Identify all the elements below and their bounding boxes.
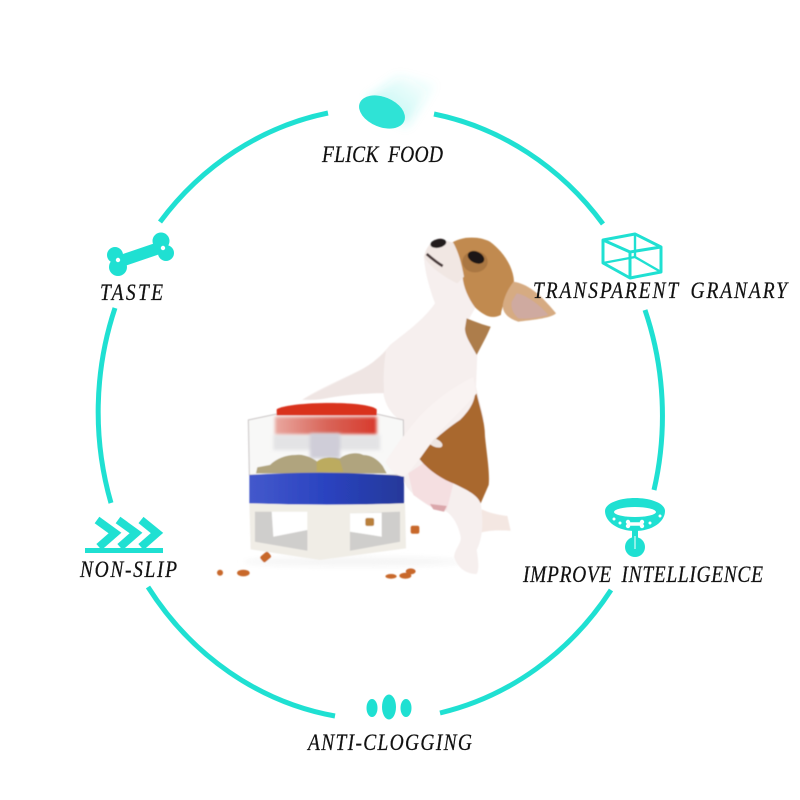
icon: bone — [107, 232, 174, 276]
circular ring of arcs — [98, 113, 662, 716]
kibbles — [217, 518, 419, 579]
feeder red lid — [277, 403, 377, 415]
label: flick food: FLICK FOOD — [321, 141, 443, 167]
eye patch — [462, 251, 488, 272]
shaded arm — [303, 351, 386, 400]
feeder white base — [249, 503, 406, 560]
pink belly — [408, 463, 453, 510]
feeder opening right — [350, 512, 400, 551]
kibble pile — [256, 453, 387, 473]
dog tail and back leg — [480, 509, 511, 533]
eye — [466, 249, 486, 266]
feeder lid inner blur — [275, 417, 377, 435]
label: taste: TASTE — [100, 279, 163, 305]
icon: transparent cube — [603, 234, 661, 278]
label: anti-clogging: ANTI-CLOGGING — [306, 729, 472, 755]
floor shadow — [243, 556, 463, 567]
tan chest — [465, 318, 491, 355]
icon: collar — [605, 498, 665, 557]
label: transparent granary: TRANSPARENT GRANARY — [533, 277, 789, 303]
feeder transparent container — [248, 414, 404, 475]
icon: non-slip chevrons — [85, 520, 163, 550]
feeder blue band — [249, 473, 404, 505]
front leg and paw — [386, 377, 477, 477]
nose — [430, 237, 447, 249]
icon: flick food — [354, 76, 436, 135]
ear — [503, 282, 556, 322]
muzzle — [424, 239, 464, 283]
dog body — [302, 239, 489, 574]
head — [450, 237, 514, 317]
label: improve intelligence: IMPROVE INTELLIGENCE — [522, 561, 763, 587]
feeder centre post — [310, 433, 340, 458]
label: non-slip: NON-SLIP — [79, 556, 177, 582]
feeder opening left — [255, 512, 307, 551]
white flank patch — [426, 436, 444, 450]
tan flank — [419, 387, 489, 503]
icon: anti-clogging ovals — [366, 694, 412, 720]
photo: dog and feeder — [217, 237, 556, 579]
